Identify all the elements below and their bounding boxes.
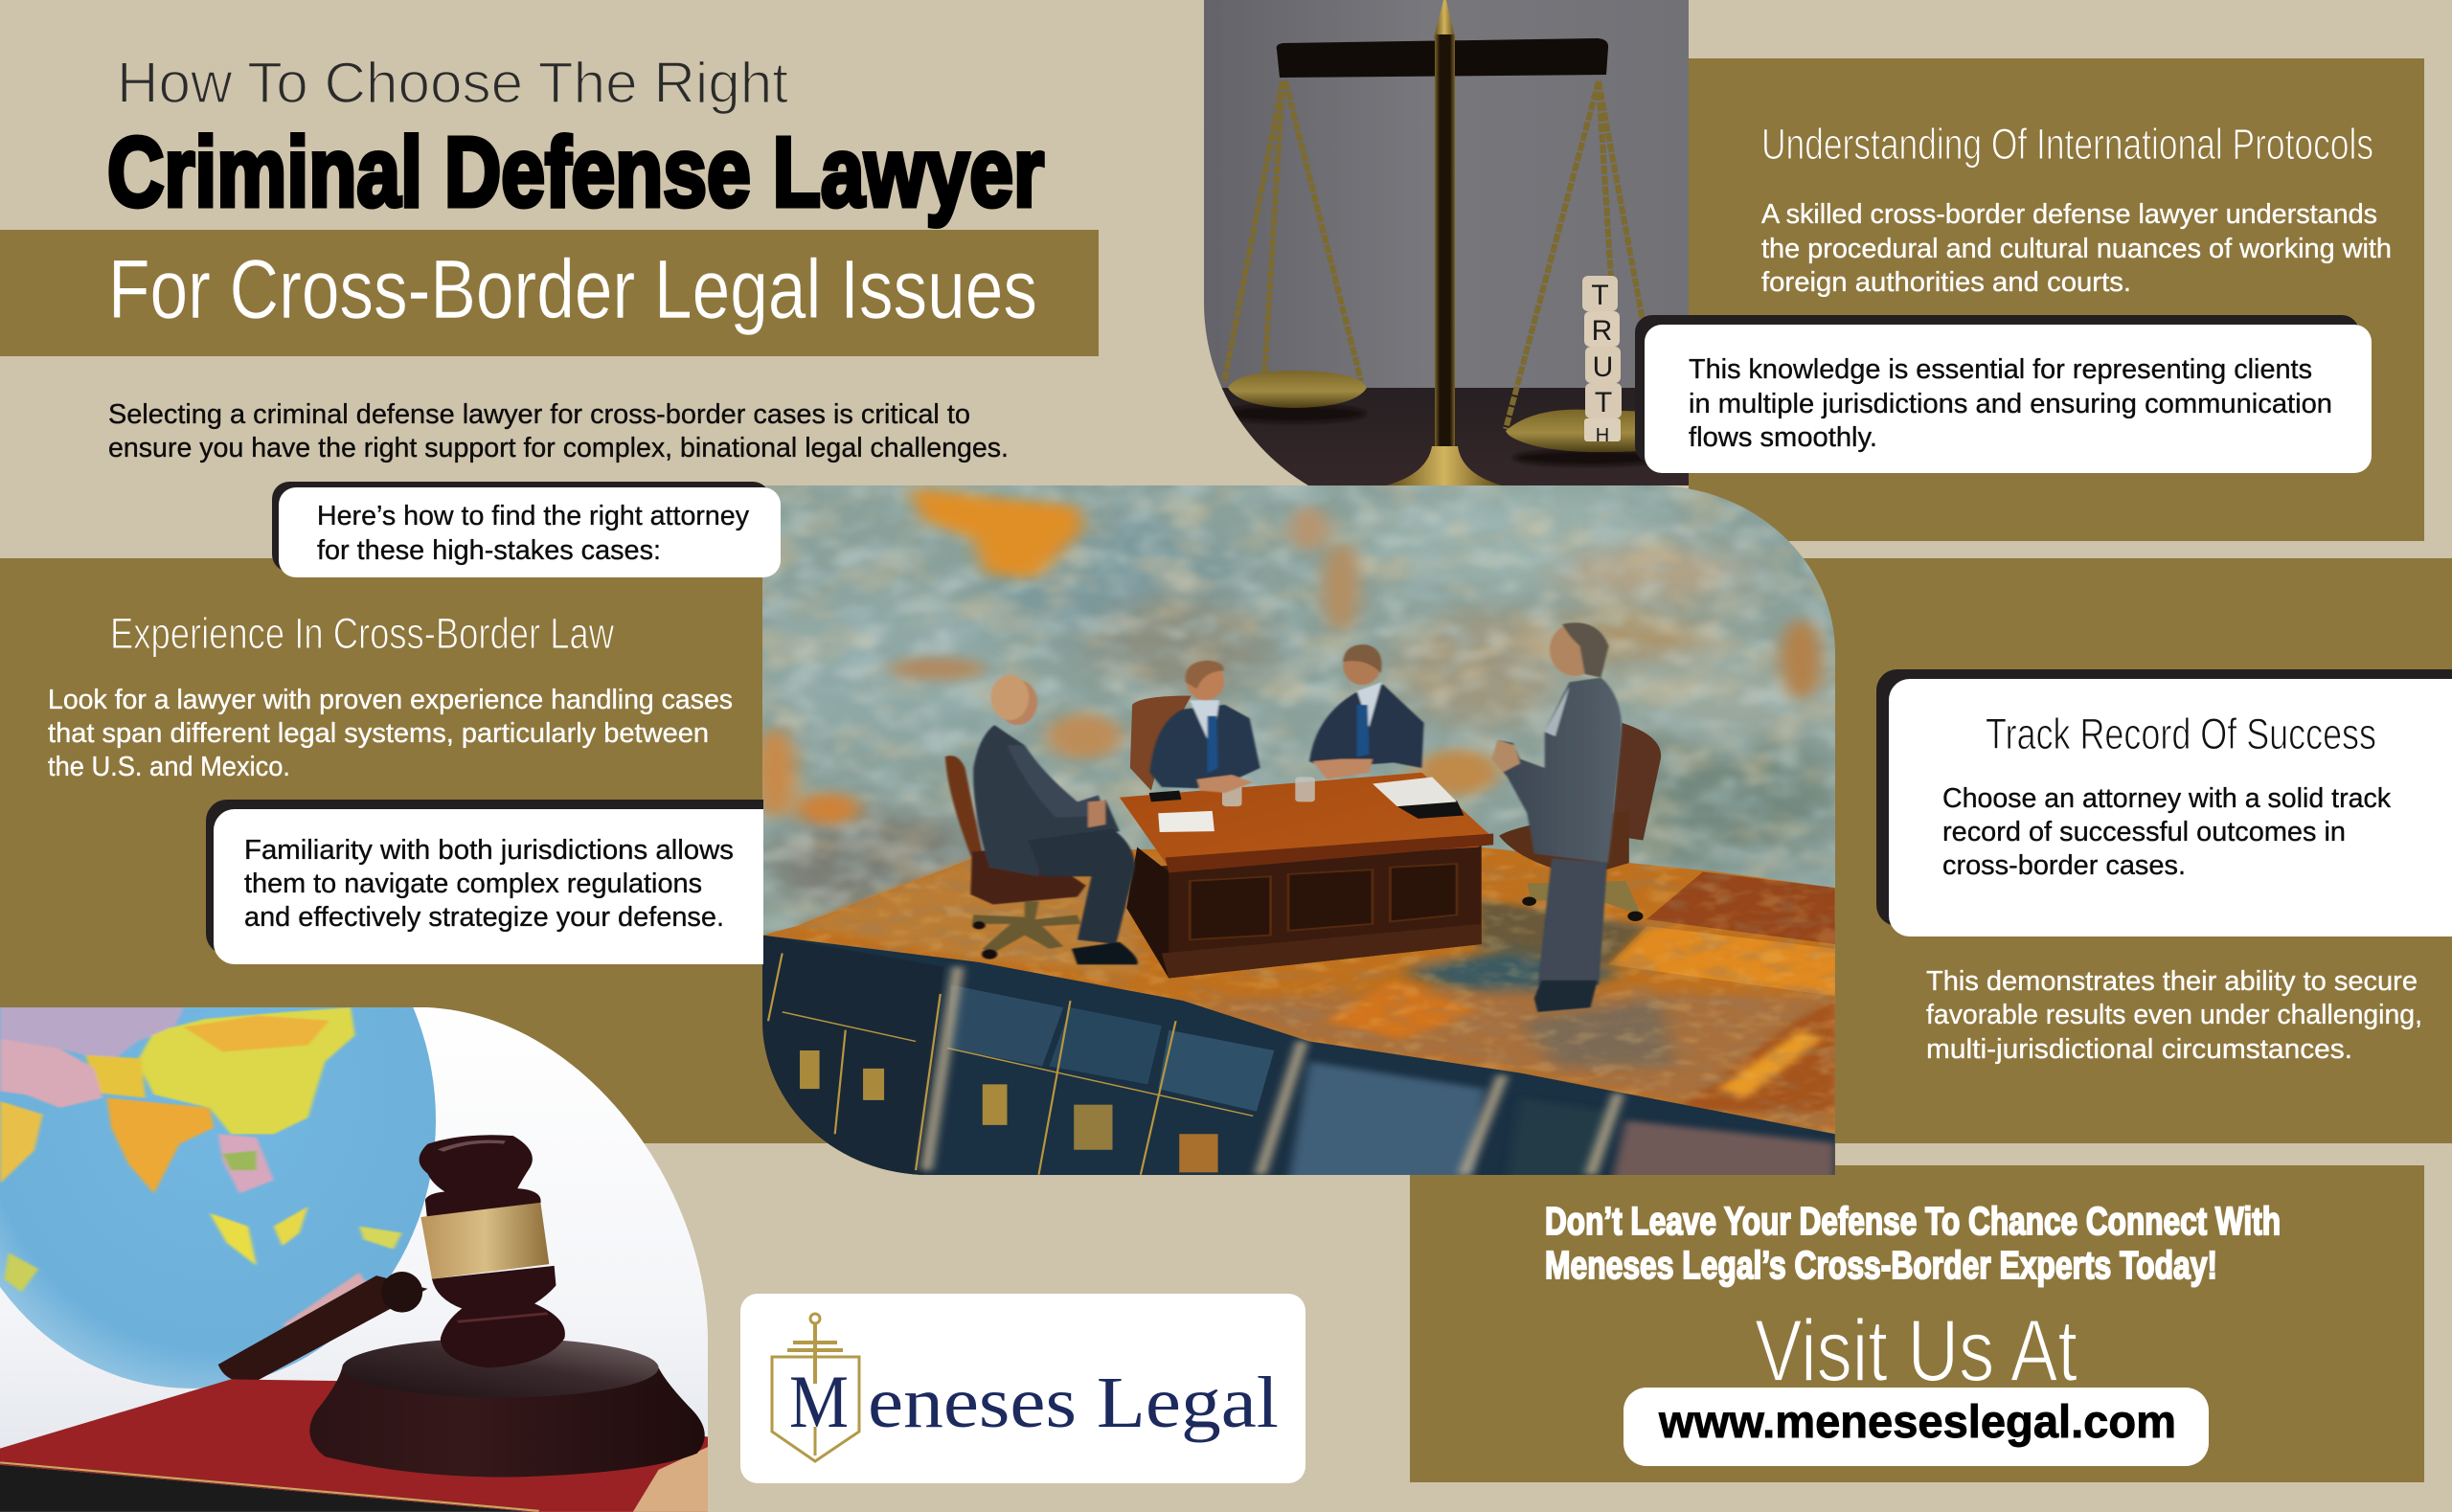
text: intro (108, 399, 1009, 463)
text: look for a lawyer: Look for a lawyer with proven experience handling cases (48, 685, 733, 715)
mid background band (0, 558, 2452, 1143)
text: logo wordmark: eneses Legal (868, 1363, 1279, 1443)
gavel (0, 1135, 708, 1512)
book spine (762, 936, 1835, 1184)
photo: balance scales with truth blocks: H (1596, 425, 1609, 446)
text: call to action (1545, 1199, 2281, 1287)
text: choose an attorney: Choose an attorney with a solid track (1942, 783, 2391, 814)
photo: miniature lawyers on book and map (747, 479, 1849, 1184)
text: familiarity: and effectively strategize your defense. (244, 902, 724, 933)
text: here's how (317, 501, 749, 566)
text: choose an attorney: record of successful outcomes in (1942, 817, 2346, 847)
text: this knowledge: flows smoothly. (1689, 422, 1877, 453)
text: here's how: Here’s how to find the right attorney (317, 501, 749, 531)
photo: balance scales with truth blocks (1204, 0, 1689, 485)
text: this demonstrates (1926, 966, 2422, 1065)
figure: lawyer back right (1309, 644, 1424, 779)
text: call to action: Meneses Legal’s Cross-Border Experts Today! (1545, 1243, 2217, 1287)
title band (0, 230, 1099, 356)
text: this knowledge: in multiple jurisdictions and ensuring communication (1689, 389, 2332, 419)
desk (1141, 845, 1482, 978)
blurred map backdrop (768, 484, 1836, 917)
card: familiarity with both jurisdictions (206, 800, 763, 964)
heading: visit us at: Visit Us At (1755, 1302, 2077, 1400)
text: choose an attorney: cross-border cases. (1942, 850, 2186, 881)
far chair and standing man's chair (1611, 723, 1661, 841)
text: skilled lawyer: the procedural and cultural nuances of working with (1761, 234, 2392, 264)
title: for cross-border legal issues: For Cross-Border Legal Issues (108, 243, 1037, 336)
text: look for a lawyer: that span different legal systems, particularly between (48, 718, 709, 749)
text: skilled lawyer: foreign authorities and courts. (1761, 267, 2131, 298)
globe (0, 1007, 436, 1388)
figure: standing lawyer (1492, 622, 1622, 1012)
icon: shield and anchor (772, 1314, 859, 1461)
sound block (309, 1367, 705, 1478)
heading: experience in cross-border law: Experience In Cross-Border Law (110, 609, 614, 658)
text: look for a lawyer: the U.S. and Mexico. (48, 752, 290, 782)
title: criminal defense lawyer: Criminal Defense Lawyer (107, 117, 1044, 227)
card: track record of success (1876, 669, 2452, 937)
text: this knowledge (1689, 354, 2332, 453)
photo: gavel and globe (0, 1007, 708, 1512)
text: website url: www.meneseslegal.com (1658, 1397, 2176, 1448)
text: this demonstrates: multi-jurisdictional circumstances. (1926, 1034, 2352, 1065)
card: this knowledge is essential (1635, 315, 2372, 473)
panel: call to action (1410, 1165, 2424, 1482)
text: look for a lawyer (48, 685, 733, 782)
text: this knowledge: This knowledge is essential for representing clients (1689, 354, 2312, 385)
text: intro: ensure you have the right support for complex, binational legal challenges. (108, 433, 1009, 463)
text: here's how: for these high-stakes cases: (317, 535, 661, 566)
card: url pill (1623, 1388, 2209, 1466)
gavel head (420, 1135, 541, 1223)
card: here's how to find the right attorney (272, 482, 781, 577)
text: skilled lawyer: A skilled cross-border defense lawyer understands (1761, 199, 2377, 230)
text: familiarity: them to navigate complex regulations (244, 869, 702, 899)
book top surface (762, 847, 1835, 1184)
text: choose an attorney (1942, 783, 2391, 881)
text: skilled lawyer (1761, 199, 2392, 298)
text: familiarity: Familiarity with both jurisdictions allows (244, 835, 734, 866)
book (0, 1379, 708, 1512)
figure: lawyer back left (1149, 661, 1260, 793)
card: logo (740, 1294, 1305, 1483)
photo: balance scales with truth blocks: U (1593, 351, 1613, 383)
title: how to choose the right: How To Choose The Right (117, 51, 788, 115)
text: this demonstrates: favorable results even under challenging, (1926, 1000, 2422, 1030)
photo: balance scales with truth blocks: T (1591, 280, 1609, 311)
back left chair (1130, 696, 1192, 791)
text: this demonstrates: This demonstrates their ability to secure (1926, 966, 2418, 997)
photo: balance scales with truth blocks: R (1592, 315, 1612, 347)
text: intro: Selecting a criminal defense lawyer for cross-border cases is critical to (108, 399, 970, 430)
text: familiarity (244, 835, 734, 933)
panel: understanding of international protocols (1689, 58, 2424, 541)
photo: balance scales with truth blocks: T (1595, 387, 1612, 418)
text: logo wordmark: M (789, 1360, 849, 1443)
figure: seated lawyer left (945, 675, 1138, 964)
